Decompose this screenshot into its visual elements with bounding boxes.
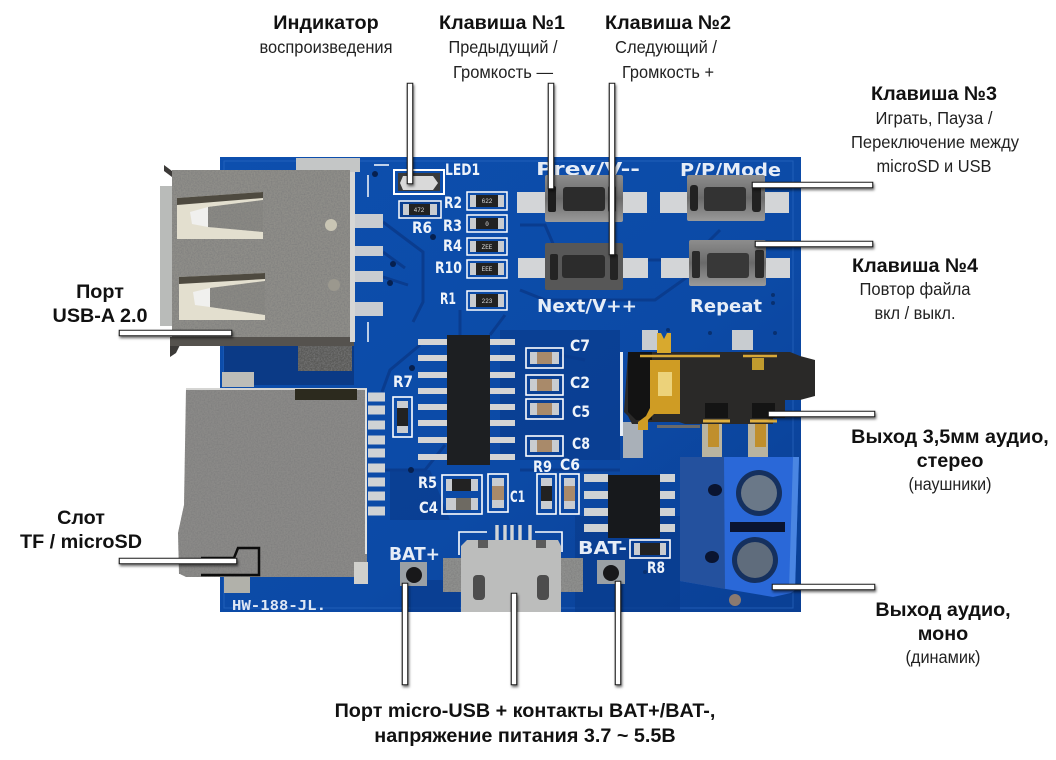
3.5mm audio jack (620, 330, 815, 458)
label: USB-A port: Порт (76, 281, 124, 303)
label: key 4: Повтор файла (860, 279, 971, 299)
PCB traces (224, 161, 793, 612)
silkscreen labels: R6 (412, 218, 432, 237)
label: key 2 (605, 12, 731, 82)
label: microSD slot (20, 507, 142, 553)
label: mono output: Выход аудио, (875, 599, 1011, 621)
resistors column: 622 (482, 198, 493, 205)
leader: stereo jack (771, 411, 872, 417)
SOP16 chip (418, 335, 515, 465)
board base (220, 157, 801, 612)
leader: key 1 (548, 86, 554, 186)
label: key 3 (851, 83, 1019, 176)
capacitors and resistors (393, 348, 670, 558)
silkscreen labels: C5 (572, 402, 590, 421)
label: key 3: Переключение между (851, 132, 1019, 152)
USB-A 2.0 port (160, 158, 383, 387)
resistors column: EEE (482, 266, 493, 273)
label: USB-A port: USB-A 2.0 (53, 305, 147, 327)
silkscreen labels: R7 (393, 372, 413, 391)
silkscreen labels: R1 (440, 289, 456, 308)
label: key 3: microSD и USB (876, 156, 992, 176)
label: microSD slot: TF / microSD (20, 531, 142, 553)
silkscreen labels: BAT- (578, 538, 627, 559)
label: power: Порт micro-USB + контакты BAT+/BAT-, (335, 700, 715, 722)
label: stereo output: (наушники) (908, 474, 992, 494)
silkscreen labels: R3 (443, 216, 462, 235)
label: key 1 (439, 12, 565, 82)
resistors column: ZEE (482, 244, 493, 251)
leader: USB-A (122, 330, 229, 336)
leader: microSD (122, 558, 234, 564)
circuit board (220, 157, 801, 614)
leader: mono terminal (775, 584, 872, 590)
label: key 1: Предыдущий / (448, 37, 558, 57)
label: power (335, 700, 715, 747)
label: stereo output (851, 426, 1049, 494)
SOP8 amplifier chip (584, 475, 675, 538)
silkscreen labels: Repeat (690, 296, 762, 317)
label: microSD slot: Слот (57, 507, 105, 529)
icon: LED1 (394, 170, 444, 218)
label: stereo output: Выход 3,5мм аудио, (851, 426, 1049, 448)
silkscreen labels: R10 (435, 258, 462, 277)
silkscreen labels: R2 (444, 193, 462, 212)
label: stereo output: стерео (917, 450, 983, 472)
leader: key 3 (755, 182, 870, 188)
silkscreen labels: C7 (570, 336, 590, 355)
silkscreen labels: C4 (419, 498, 438, 517)
silkscreen labels: Prev/V-- (536, 159, 640, 180)
label: USB-A port (53, 281, 147, 327)
silkscreen labels: R9 (533, 457, 552, 476)
silkscreen labels: R4 (443, 236, 462, 255)
micro-USB port (443, 525, 583, 612)
leader: key 4 (758, 241, 870, 247)
label: key 4: вкл / выкл. (874, 303, 956, 323)
silkscreen labels: R5 (418, 473, 437, 492)
tactile button: Next (518, 243, 648, 290)
label: key 1: Клавиша №1 (439, 12, 565, 34)
label: mono output: (динамик) (906, 647, 980, 667)
label: LED indicator: Индикатор (273, 12, 379, 34)
leader lines (122, 86, 872, 682)
BAT+ contact (400, 562, 427, 586)
label: key 3: Играть, Пауза / (876, 108, 993, 128)
tactile button: Repeat (661, 240, 790, 286)
silkscreen labels: Next/V++ (537, 296, 637, 317)
resistors column: 0 (485, 221, 489, 228)
silkscreen labels: C2 (570, 373, 590, 392)
silkscreen labels (389, 159, 781, 577)
tactile button: Prev (517, 175, 647, 222)
model label: HW-188-JL. (232, 599, 326, 614)
leader: BAT+ (402, 586, 408, 682)
leader: LED (407, 86, 413, 181)
leader: micro-USB (511, 596, 517, 682)
label: key 3: Клавиша №3 (871, 83, 997, 105)
leader: key 2 (609, 86, 615, 252)
microSD slot (178, 389, 385, 593)
label: power: напряжение питания 3.7 ~ 5.5В (374, 725, 676, 747)
label: key 4: Клавиша №4 (852, 255, 978, 277)
label: key 2: Следующий / (615, 37, 717, 57)
label: LED indicator (260, 12, 392, 57)
label: key 2: Клавиша №2 (605, 12, 731, 34)
BAT- contact (597, 560, 625, 584)
silkscreen labels: C8 (572, 434, 590, 453)
silkscreen labels: R8 (647, 558, 665, 577)
tactile button: Play Pause Mode (660, 175, 789, 221)
label: LED indicator: воспроизведения (260, 37, 392, 57)
resistors column: 223 (482, 298, 493, 305)
silkscreen labels: P/P/Mode (680, 160, 781, 181)
screw terminal (680, 457, 799, 606)
resistors column (467, 192, 507, 310)
silkscreen labels: LED1 (445, 160, 480, 179)
silkscreen labels: BAT+ (389, 544, 440, 565)
label: key 2: Громкость + (622, 62, 714, 82)
label: key 1: Громкость — (453, 62, 553, 82)
icon: LED1: 472 (414, 207, 425, 214)
silkscreen labels: C1 (510, 487, 525, 506)
label: mono output: моно (918, 623, 968, 645)
silkscreen labels: C6 (560, 455, 580, 474)
leader: BAT- (615, 584, 621, 682)
label: key 4 (852, 255, 978, 323)
label: mono output (875, 599, 1011, 667)
